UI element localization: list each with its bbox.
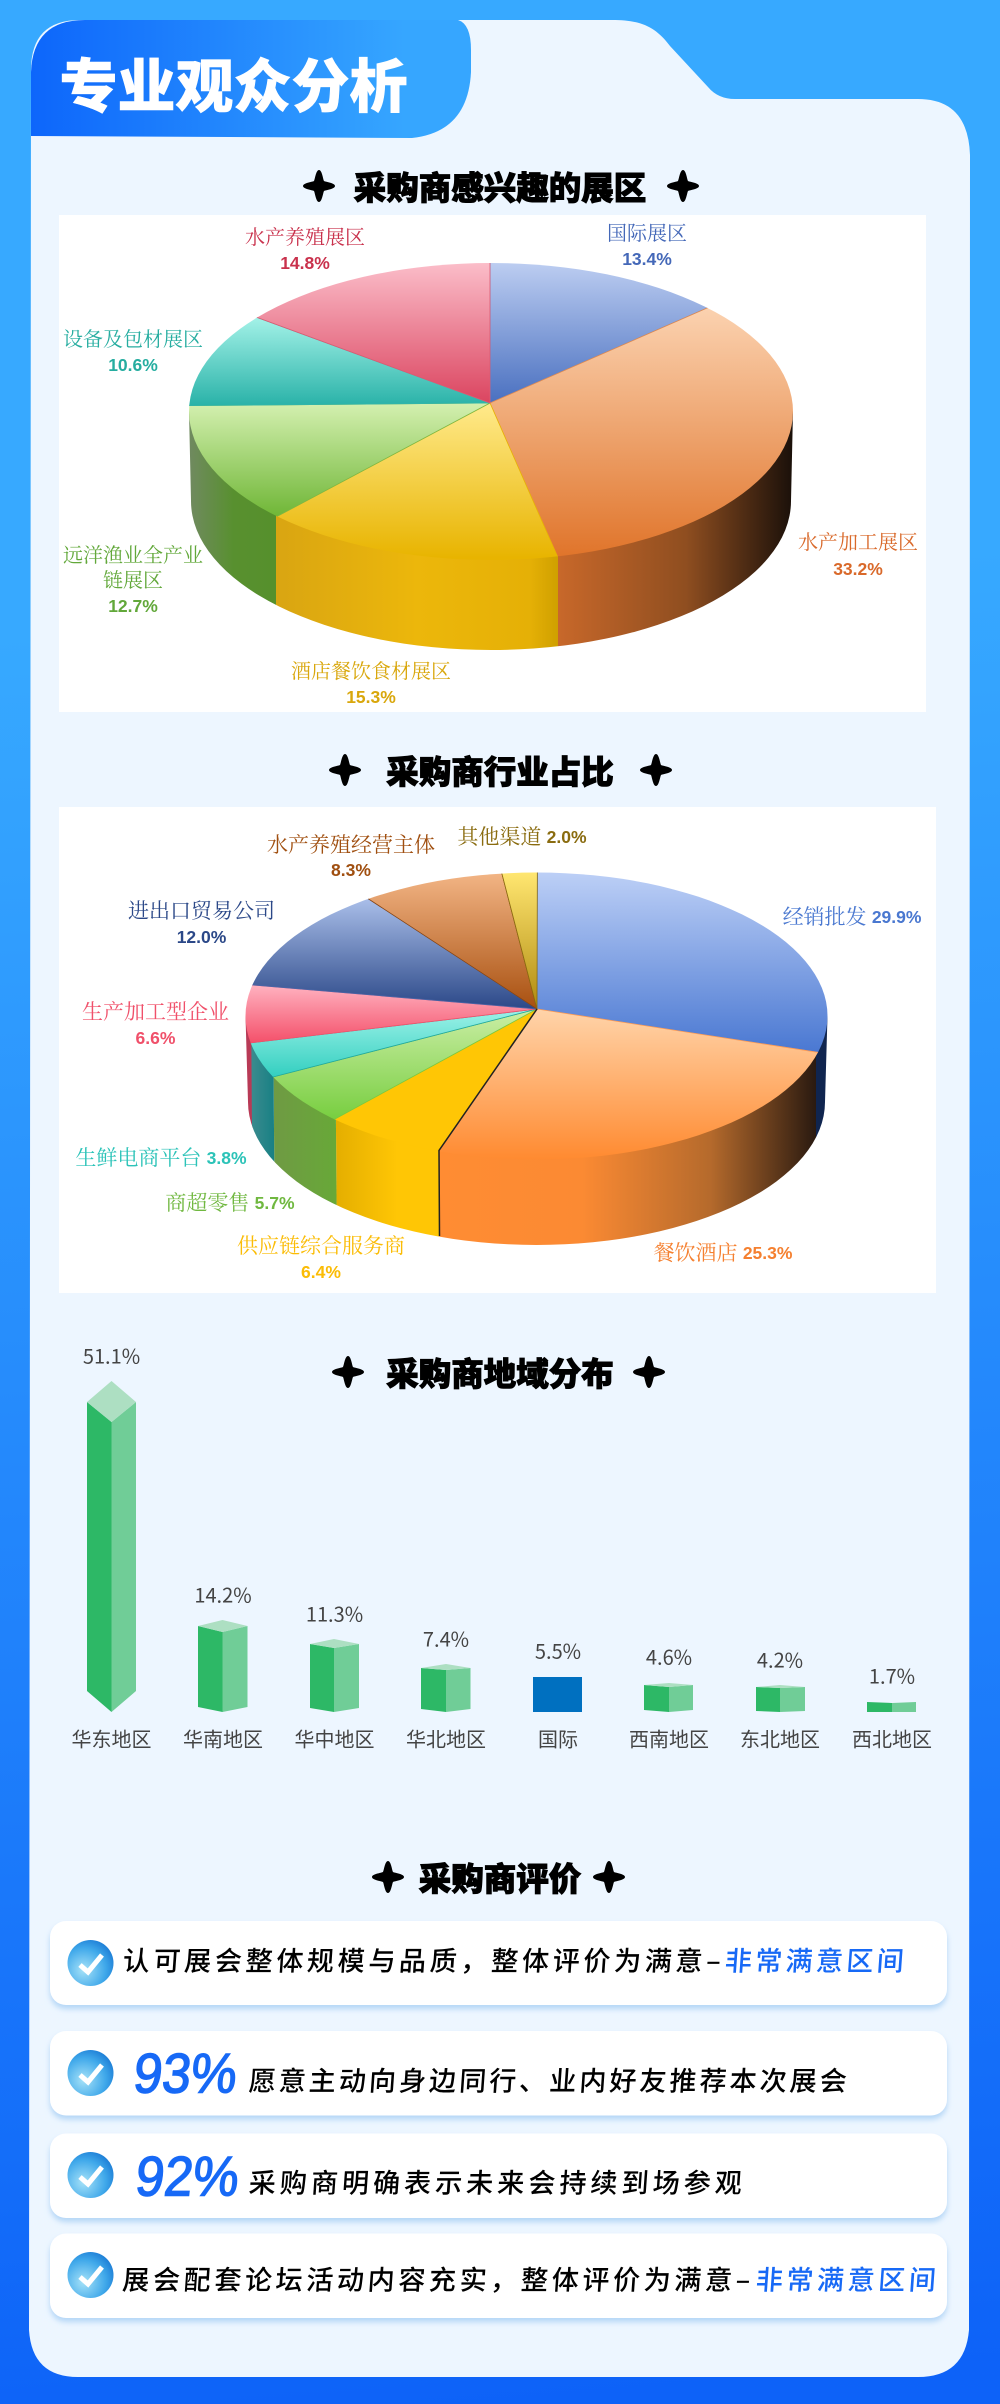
text: 愿意主动向身边同行、业内好友推荐本次展会 — [248, 2060, 848, 2098]
header tab — [31, 20, 471, 138]
pie labels: 10.6% — [108, 355, 158, 375]
bar: 西南地区 — [629, 1642, 709, 1752]
bar: 华中地区: 华中地区 — [294, 1724, 374, 1752]
number: 93% — [131, 2042, 240, 2104]
pie labels: 国际展区 — [607, 222, 687, 245]
bar: 华南地区: 14.2% — [194, 1580, 252, 1608]
text: 非常满意区间 — [724, 1940, 905, 1978]
bar: 华南地区: 华南地区 — [183, 1724, 263, 1752]
bar: 华南地区 — [183, 1580, 263, 1752]
pie labels: 水产养殖经营主体 — [267, 833, 435, 857]
pie labels: 13.4% — [622, 249, 672, 269]
bar: 西北地区: 西北地区 — [852, 1724, 932, 1752]
number: 92% — [133, 2145, 242, 2207]
pie labels: 其他渠道 2.0% — [457, 825, 587, 849]
card: 92% — [50, 2134, 947, 2218]
pie labels: 生产加工型企业 — [82, 1000, 229, 1024]
bar: 国际: 国际 — [538, 1724, 578, 1752]
icon: check — [68, 2152, 114, 2198]
bar: 东北地区: 东北地区 — [740, 1724, 820, 1752]
bar: 国际: 5.5% — [535, 1636, 581, 1664]
divider between catering and supply slices — [439, 1009, 537, 1236]
bar: 西南地区: 4.6% — [646, 1642, 692, 1670]
bar: 西北地区 — [852, 1660, 932, 1752]
card: 论坛活动 — [50, 2234, 947, 2318]
heading: 采购商评价: 采购商评价 — [419, 1854, 582, 1900]
pie labels — [63, 222, 918, 707]
bar: 华中地区: 11.3% — [306, 1598, 363, 1628]
card: 93% — [50, 2031, 947, 2116]
heading: 采购商行业占比 — [329, 746, 672, 794]
heading: 采购商地域分布: 采购商地域分布 — [386, 1348, 614, 1396]
bar: 华东地区 — [72, 1340, 152, 1752]
pie labels: 14.8% — [280, 253, 330, 273]
text: 展会配套论坛活动内容充实，整体评价为满意– — [121, 2259, 752, 2297]
bar: 东北地区 — [740, 1644, 820, 1752]
bar: 东北地区: 4.2% — [757, 1644, 803, 1674]
pie labels: 进出口贸易公司 — [128, 899, 275, 923]
text: 非常满意区间 — [755, 2259, 937, 2297]
card: 整体评价 — [50, 1921, 947, 2005]
bar: 华北地区 — [406, 1624, 486, 1752]
pie labels: 6.6% — [136, 1028, 176, 1048]
pie labels: 15.3% — [346, 687, 396, 707]
text: 认可展会整体规模与品质，整体评价为满意– — [122, 1940, 722, 1978]
bar: 华北地区: 7.4% — [423, 1624, 469, 1652]
pie labels: 经销批发 29.9% — [783, 905, 922, 929]
heading: 采购商地域分布 — [332, 1348, 665, 1396]
bar: 华北地区: 华北地区 — [406, 1724, 486, 1752]
pie sides — [246, 1016, 828, 1245]
pie labels: 33.2% — [833, 559, 883, 579]
pie labels: 12.0% — [177, 927, 227, 947]
bar: 国际 — [533, 1636, 582, 1752]
pie top slices — [246, 872, 828, 1156]
bar: 华东地区: 华东地区 — [72, 1724, 152, 1752]
panel: industry pie chart — [59, 800, 936, 1293]
pie labels: 12.7% — [108, 596, 158, 616]
pie labels: 供应链综合服务商 — [237, 1234, 405, 1258]
bar: 西北地区: 1.7% — [869, 1660, 915, 1690]
panel: exhibition pie chart — [59, 200, 926, 712]
pie labels: 商超零售 5.7% — [165, 1191, 295, 1215]
icon: check — [68, 1940, 114, 1986]
title: 专业观众分析 — [59, 40, 408, 124]
heading: 采购商感兴趣的展区: 采购商感兴趣的展区 — [354, 162, 646, 210]
bar: 华东地区: 51.1% — [83, 1340, 140, 1370]
pie labels: 8.3% — [331, 860, 371, 880]
bar: 西南地区: 西南地区 — [629, 1724, 709, 1752]
pie labels: 酒店餐饮食材展区 — [291, 660, 451, 683]
text: 采购商明确表示未来会持续到场参观 — [248, 2162, 743, 2200]
pie labels — [75, 825, 922, 1282]
pie labels: 水产养殖展区 — [245, 226, 365, 249]
pie sides — [185, 400, 798, 660]
bar chart: regional distribution — [72, 1340, 932, 1752]
pie labels: 水产加工展区 — [798, 531, 918, 554]
heading: 采购商评价 — [372, 1854, 625, 1900]
pie labels: 生鲜电商平台 3.8% — [75, 1146, 247, 1170]
pie top slices — [189, 263, 793, 560]
icon: check — [68, 2050, 114, 2096]
pie labels: 远洋渔业全产业 — [63, 544, 203, 567]
pie labels: 链展区 — [103, 569, 163, 592]
pie labels: 设备及包材展区 — [63, 328, 203, 351]
bar: 华中地区 — [294, 1598, 374, 1752]
pie labels: 餐饮酒店 25.3% — [654, 1241, 793, 1265]
pie labels: 6.4% — [301, 1262, 341, 1282]
heading: 采购商行业占比: 采购商行业占比 — [386, 746, 614, 794]
icon: check — [68, 2252, 114, 2298]
